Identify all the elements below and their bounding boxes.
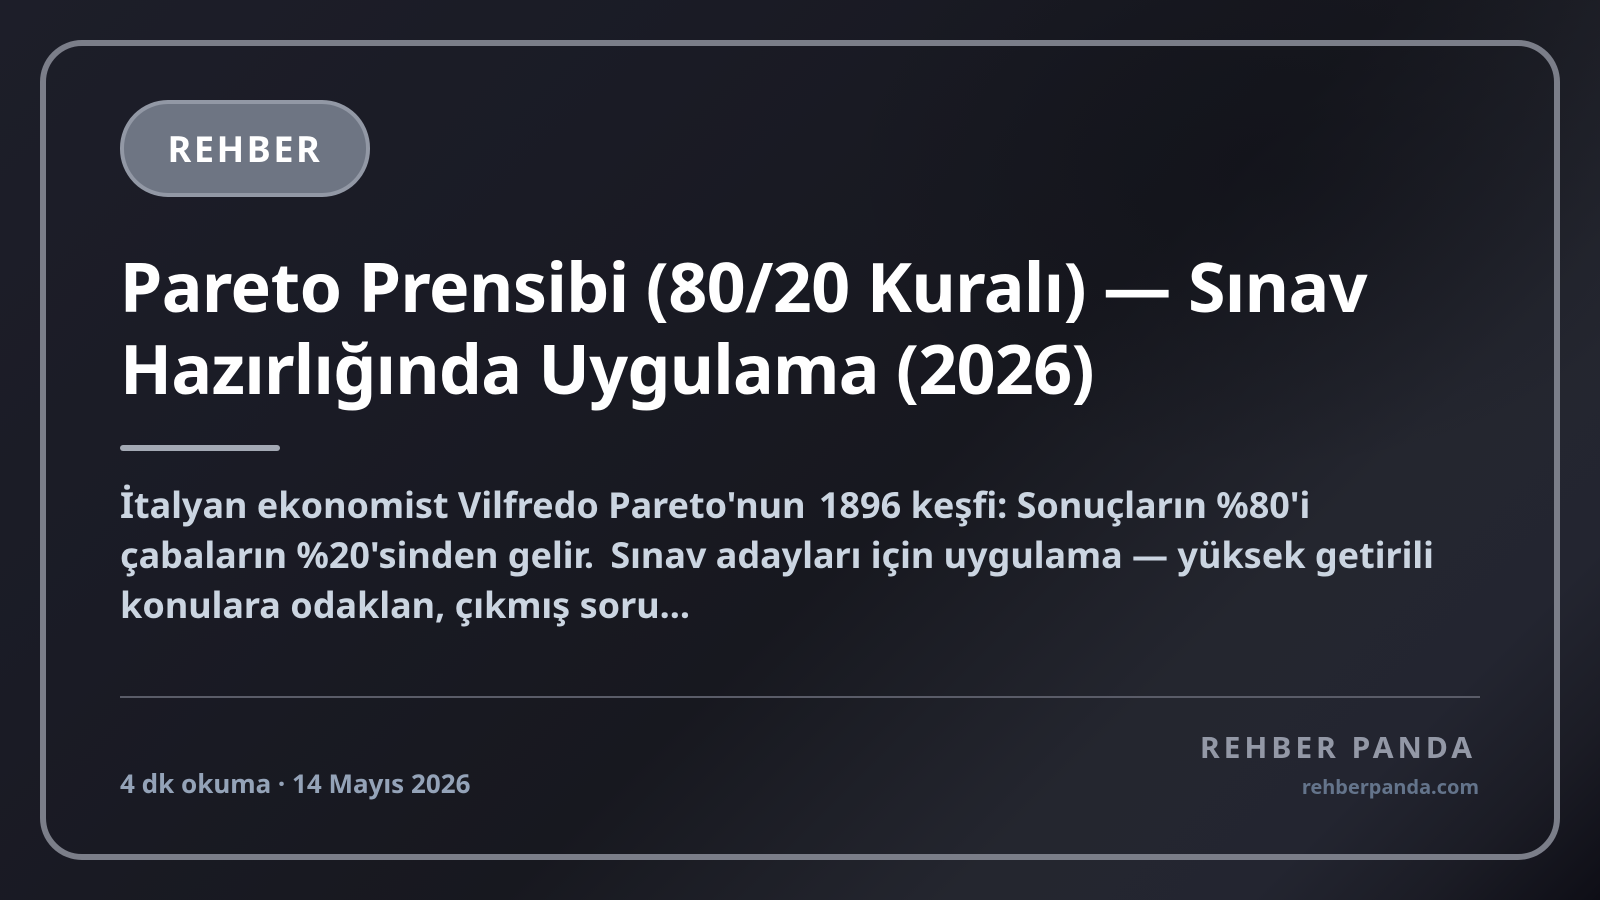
badge: REHBER: REHBER [168, 124, 322, 173]
badge: REHBER [120, 100, 370, 197]
subtitle text: İtalyan ekonomist Vilfredo Pareto'nun 1896 keşfi: Sonuçların %80'i [120, 480, 1310, 529]
brand name: REHBER PANDA [1200, 726, 1476, 767]
title: Pareto Prensibi (80/20 Kuralı) — Sınav [120, 239, 1367, 332]
accent divider [120, 445, 280, 451]
footer rule [120, 696, 1480, 698]
reading time and date: 4 dk okuma · 14 Mayıs 2026 [120, 765, 470, 801]
subtitle text: çabaların %20'sinden gelir. Sınav adayları için uygulama — yüksek getirili [120, 530, 1434, 579]
subtitle text: konulara odaklan, çıkmış soru... [120, 580, 690, 629]
subtitle text [120, 480, 1434, 629]
title: Hazırlığında Uygulama (2026) [120, 321, 1094, 414]
brand url: rehberpanda.com [1302, 773, 1479, 800]
title [120, 239, 1368, 414]
